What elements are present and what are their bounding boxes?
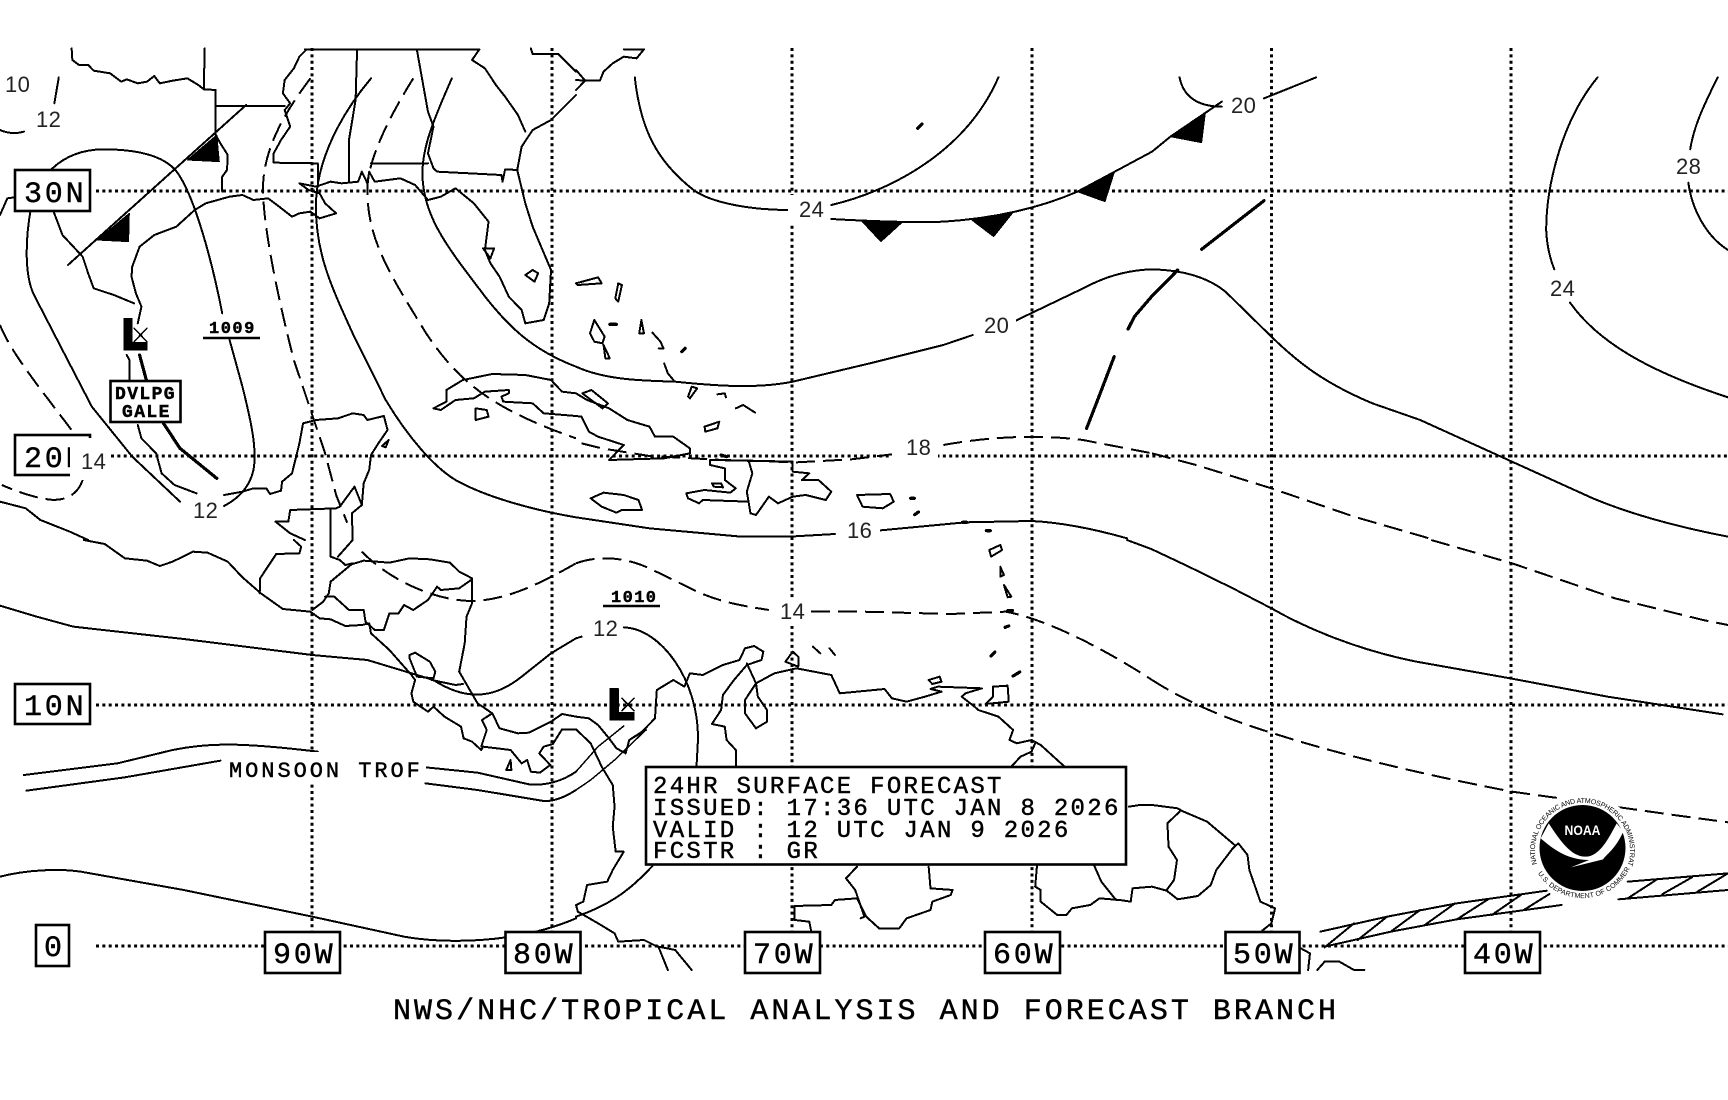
- monsoon trough double lines: [24, 726, 646, 801]
- lon label: 80W: [506, 932, 580, 973]
- isobar: dashed 14 long: [263, 78, 1728, 822]
- isobar: dashed 14 west: [0, 325, 83, 500]
- icon: NOAA logo: NATIONAL OCEANIC AND ATMOSPHERIC ADMINISTRATION: [1530, 798, 1635, 867]
- label: 18: 18: [906, 435, 931, 460]
- label: 28: 28: [1676, 154, 1701, 179]
- L symbol: gulf low: [124, 318, 147, 350]
- label: 24: [788, 195, 828, 223]
- isobars and fronts: [0, 77, 1728, 947]
- label: 12 caribbean: 12: [593, 616, 618, 641]
- label: 28: [1672, 152, 1706, 179]
- label: monsoon trof: MONSOON TROF: [229, 759, 423, 784]
- lat label: 30N: [15, 170, 90, 212]
- map: land outlines: [0, 48, 1364, 970]
- lat label: 20N partly masked: 14: [81, 449, 106, 474]
- cold front: texas: [68, 105, 246, 265]
- pressure: 1009: 1009: [209, 320, 256, 339]
- isobar: 20: [422, 78, 1728, 537]
- label: 20 northeast: 20: [1231, 93, 1256, 118]
- gale box: [110, 381, 180, 423]
- lon label: 90W: [265, 932, 340, 973]
- label: 16: 16: [847, 518, 872, 543]
- label: 20 central: 20: [984, 313, 1009, 338]
- isobar: dashed 18: [367, 78, 1728, 625]
- lon label: 70W: [745, 932, 820, 973]
- label: 24 east: 24: [1550, 276, 1575, 301]
- lon label: 60W: [985, 932, 1060, 973]
- low track lines near gale box: [127, 355, 217, 493]
- isobars: 24 and 28 east: [1546, 77, 1728, 397]
- label: 12 gulf: 12: [193, 498, 218, 523]
- forecast info box: [646, 767, 1126, 866]
- lat label: 20N partly masked: [15, 435, 108, 480]
- forecast info box: ISSUED: 17:36 UTC JAN 8 2026: [653, 796, 1121, 823]
- label: 12 northwest: 12: [36, 107, 61, 132]
- lon label: 70W: 70W: [753, 939, 815, 973]
- lat label: 10N: [15, 684, 90, 725]
- label: 18: [892, 435, 938, 460]
- label: 14 caribbean: 14: [780, 599, 805, 624]
- lat label: 0: [36, 925, 69, 966]
- icon: NOAA logo: U.S. DEPARTMENT OF COMMERCE: [1538, 867, 1630, 898]
- lon label: 40W: 40W: [1473, 939, 1535, 973]
- trough: thick dashed atlantic: [1087, 201, 1264, 428]
- lat lon dotted grid: [96, 48, 1728, 946]
- shear line hatched band: [1320, 873, 1728, 947]
- lon label: 50W: [1226, 932, 1300, 973]
- lon label: 40W: [1465, 932, 1540, 973]
- lat label: 10N: 10N: [24, 691, 86, 725]
- icon: NOAA logo: [1530, 798, 1635, 898]
- isobar: 12 caribbean: [0, 606, 698, 941]
- footer credit: NWS/NHC/TROPICAL ANALYSIS AND FORECAST BRANCH: [393, 995, 1339, 1029]
- forecast info box: 24HR SURFACE FORECAST: [653, 774, 1004, 801]
- isobar: 1009 low loop: [0, 77, 255, 506]
- forecast info box: VALID : 12 UTC JAN 9 2026: [653, 818, 1071, 845]
- lon label: 60W: 60W: [993, 939, 1055, 973]
- isobar: 16: [316, 78, 1723, 714]
- gale box: GALE: [122, 403, 171, 423]
- L symbol: caribbean low: [610, 688, 634, 720]
- lat label: 20N partly masked: 20N: [24, 443, 86, 477]
- lon label: 90W: 90W: [273, 939, 335, 973]
- cold front: atlantic: [831, 102, 1222, 242]
- forecast info box: FCSTR : GR: [653, 839, 820, 866]
- label: 10: 10: [5, 72, 30, 97]
- lon label: 50W: 50W: [1233, 939, 1295, 973]
- label: 14 caribbean: [776, 599, 810, 626]
- isobar: 24 atlantic: [635, 77, 1316, 210]
- gale box: DVLPG: [115, 385, 176, 405]
- icon: NOAA logo: NOAA: [1564, 822, 1600, 838]
- lat label: 30N: 30N: [24, 178, 86, 212]
- pressure: 1010: 1010: [611, 589, 657, 608]
- lat label: 0: 0: [44, 932, 62, 966]
- label: 16: [836, 518, 880, 543]
- label: 24: 24: [799, 197, 824, 222]
- label: 20 central: [976, 313, 1016, 338]
- lon label: 80W: 80W: [513, 939, 575, 973]
